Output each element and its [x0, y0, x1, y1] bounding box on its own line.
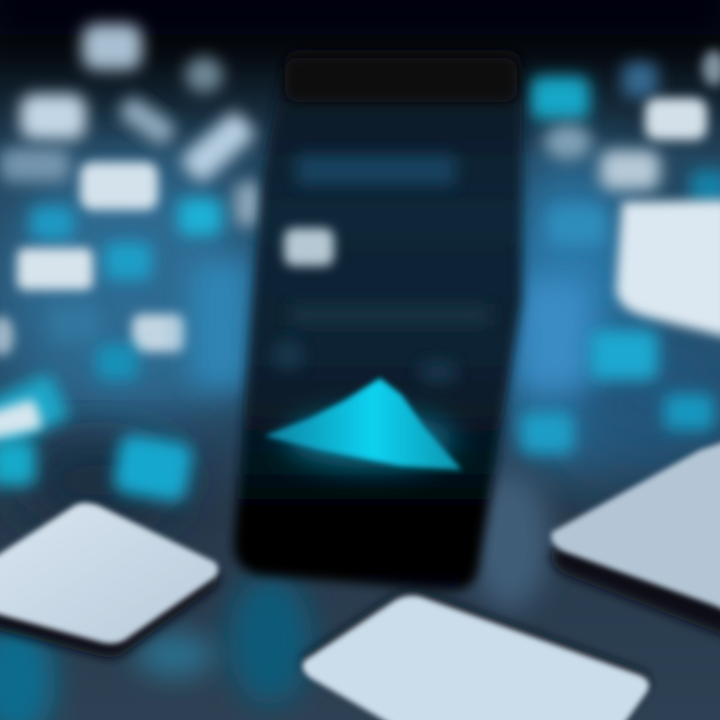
- card: right small: [234, 182, 264, 226]
- card: upper left: [20, 94, 86, 140]
- screen card: [284, 228, 334, 266]
- card: blue patch: [50, 305, 100, 341]
- screen dots right: [418, 360, 458, 384]
- card: wide: [0, 148, 70, 182]
- card: top: [82, 24, 142, 70]
- card: cyan: [30, 206, 74, 240]
- card: tilted bright: [178, 109, 258, 185]
- screen dots: [272, 339, 304, 371]
- screen text band: [290, 304, 490, 326]
- card: white top right: [645, 98, 707, 140]
- card: large white panel: [616, 200, 720, 338]
- tablet: bottom centre: [302, 591, 649, 720]
- card: blue mid: [520, 280, 590, 390]
- card: tilted: [116, 94, 178, 148]
- screen header glow: [296, 155, 456, 185]
- phone top bar: [285, 58, 517, 102]
- floating cards: left cluster: [0, 24, 264, 504]
- card: cyan mid: [590, 330, 658, 380]
- card: blue top: [622, 62, 658, 98]
- smartphone: [234, 50, 522, 590]
- card: cyan low: [520, 412, 574, 454]
- phone body: [234, 50, 522, 590]
- card: cyan lower: [111, 432, 195, 504]
- card: blue patch right: [190, 260, 250, 390]
- card: light: [600, 150, 660, 190]
- card: cyan: [178, 198, 222, 236]
- card: cyan edge: [0, 372, 71, 448]
- card: small top: [185, 57, 223, 93]
- card: lower white: [17, 248, 93, 290]
- card: cyan low right: [664, 394, 714, 430]
- card: cyan edge lower: [0, 440, 36, 486]
- chart glow: [285, 412, 455, 468]
- foreground tablets: [0, 440, 720, 720]
- card: cyan edge: [690, 170, 720, 206]
- floating cards: right cluster: [520, 50, 720, 454]
- tablet: right: [551, 440, 720, 637]
- card: white edge: [0, 398, 43, 444]
- card: cyan: [104, 242, 152, 280]
- card: edge: [0, 316, 14, 356]
- area chart: [264, 378, 462, 470]
- card: cyan small: [96, 344, 138, 380]
- card: grey: [544, 124, 592, 160]
- tablet: bottom left: [0, 503, 218, 657]
- card: centre: [80, 162, 158, 210]
- card: edge: [702, 50, 720, 86]
- card: cyan top: [530, 76, 590, 120]
- card: lower centre: [132, 314, 186, 352]
- card: blue: [548, 205, 606, 245]
